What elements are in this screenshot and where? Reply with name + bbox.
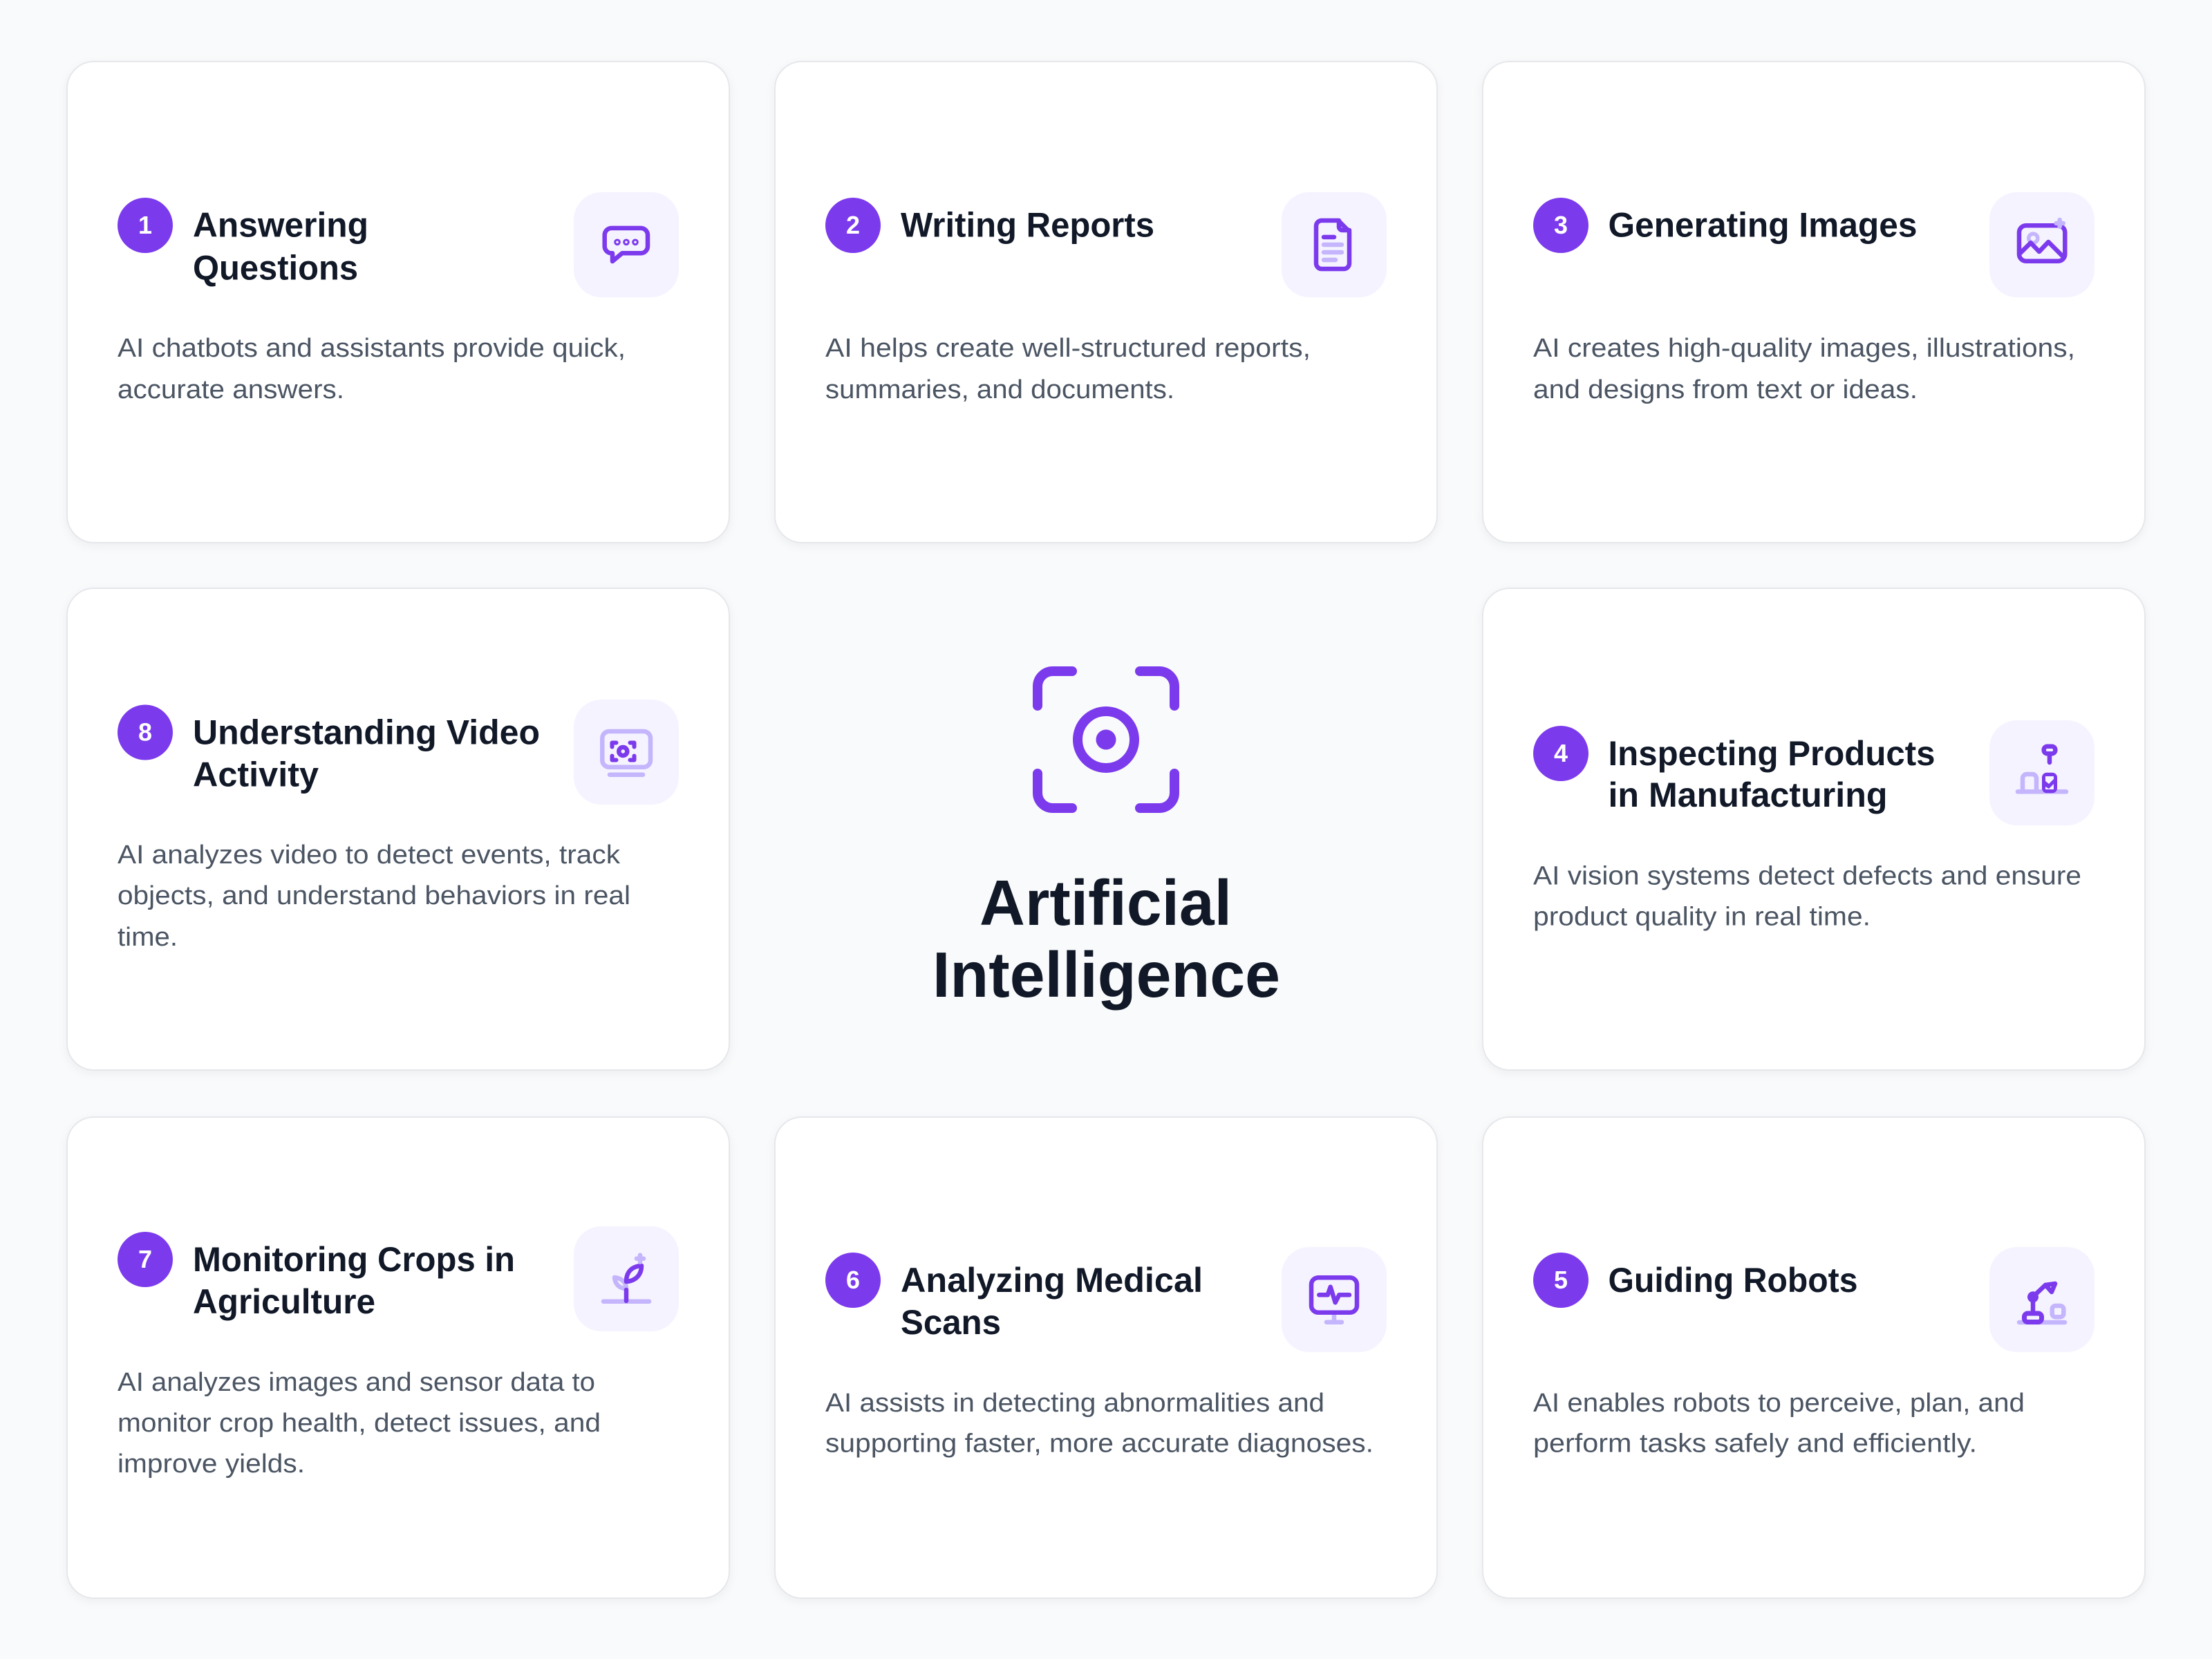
description: understanding video activity: time. [118, 923, 178, 952]
description: generating images [1533, 334, 2075, 404]
description: guiding robots: AI enables robots to perceive, plan, and [1533, 1389, 2025, 1418]
center: artificial intelligence hub [932, 671, 1280, 1011]
description: inspecting products: product quality in real time. [1533, 903, 1871, 932]
number badge 8 [118, 705, 173, 760]
number badge 1: 1 [138, 211, 152, 239]
number badge 3: 3 [1554, 211, 1568, 239]
icon: robot arm [1989, 1247, 2094, 1352]
description: writing reports: summaries, and documents. [825, 375, 1174, 404]
description: guiding robots: perform tasks safely and efficiently. [1533, 1430, 1977, 1459]
number badge 5 [1533, 1253, 1588, 1308]
description: inspecting products [1533, 861, 2081, 932]
heading: answering questions: Questions [193, 249, 358, 288]
heading: understanding video activity: Understanding Video [193, 713, 540, 752]
description: writing reports [825, 334, 1311, 404]
heading: understanding video activity: Activity [193, 755, 319, 794]
heading: writing reports: Writing Reports [901, 206, 1154, 245]
heading: analyzing medical scans [901, 1261, 1203, 1342]
description: monitoring crops: monitor crop health, detect issues, and [118, 1409, 601, 1438]
description: understanding video activity: AI analyzes video to detect events, track [118, 841, 621, 870]
heading: monitoring crops in agriculture: Monitoring Crops in [193, 1240, 515, 1279]
description: monitoring crops: improve yields. [118, 1450, 305, 1479]
description: writing reports: AI helps create well-structured reports, [825, 334, 1311, 363]
icon: sprout [574, 1226, 679, 1331]
number badge 1 [118, 198, 173, 253]
description: understanding video activity [118, 841, 630, 952]
heading: generating images: Generating Images [1608, 206, 1918, 245]
description: analyzing medical scans: supporting faster, more accurate diagnoses. [825, 1430, 1374, 1459]
description: understanding video activity: objects, and understand behaviors in real [118, 881, 630, 910]
description: monitoring crops [118, 1368, 601, 1479]
number badge 4: 4 [1554, 739, 1568, 767]
icon: video monitor [574, 700, 679, 805]
heading: inspecting products in manufacturing: in Manufacturing [1608, 776, 1887, 814]
description: analyzing medical scans: AI assists in detecting abnormalities and [825, 1389, 1324, 1418]
heading: understanding video activity [193, 713, 540, 794]
description: inspecting products: AI vision systems detect defects and ensure [1533, 861, 2081, 890]
number badge 4 [1533, 726, 1588, 781]
main title: Intelligence [932, 939, 1280, 1011]
description: monitoring crops: AI analyzes images and sensor data to [118, 1368, 595, 1397]
heading: inspecting products in manufacturing: Inspecting Products [1608, 734, 1936, 773]
icon: image [1989, 192, 2094, 297]
icon: document [1282, 192, 1387, 297]
number badge 7 [118, 1232, 173, 1287]
description: generating images: AI creates high-quality images, illustrations, [1533, 334, 2075, 363]
panel: 8 understanding video activity [67, 588, 729, 1070]
number badge 7: 7 [138, 1245, 152, 1273]
description: answering questions: AI chatbots and assistants provide quick, [118, 334, 626, 363]
description: guiding robots [1533, 1389, 2025, 1459]
heading: inspecting products in manufacturing [1608, 734, 1936, 814]
number badge 3 [1533, 198, 1588, 253]
panel: 6 analyzing medical scans [775, 1117, 1437, 1598]
icon: chat bubble [574, 192, 679, 297]
heading: analyzing medical scans: Analyzing Medical [901, 1261, 1203, 1300]
panel: 3 generating images [1483, 62, 2145, 543]
panel: 1 answering questions [67, 62, 729, 543]
description: answering questions [118, 334, 626, 404]
number badge 8: 8 [138, 718, 152, 747]
main title: Artificial [980, 867, 1232, 939]
description: answering questions: accurate answers. [118, 375, 344, 404]
heading: answering questions [193, 206, 368, 288]
description: analyzing medical scans [825, 1389, 1374, 1459]
panel: 4 inspecting products [1483, 588, 2145, 1070]
number badge 6: 6 [846, 1266, 860, 1294]
heading: monitoring crops in agriculture [193, 1240, 515, 1321]
icon: focus target [1038, 671, 1174, 808]
panel: 5 guiding robots [1483, 1117, 2145, 1598]
description: generating images: and designs from text or ideas. [1533, 375, 1918, 404]
number badge 2 [825, 198, 881, 253]
number badge 2: 2 [846, 211, 860, 239]
main title [932, 867, 1280, 1011]
number badge 6 [825, 1253, 881, 1308]
heading: guiding robots: Guiding Robots [1608, 1261, 1858, 1300]
panel: 7 monitoring crops [67, 1117, 729, 1598]
heading: analyzing medical scans: Scans [901, 1303, 1001, 1342]
number badge 5: 5 [1554, 1266, 1568, 1294]
heading: answering questions: Answering [193, 206, 368, 245]
icon: medical monitor [1282, 1247, 1387, 1352]
heading: monitoring crops in agriculture: Agriculture [193, 1282, 375, 1321]
icon: inspection station [1989, 720, 2094, 825]
panel: 2 writing reports [775, 62, 1437, 543]
